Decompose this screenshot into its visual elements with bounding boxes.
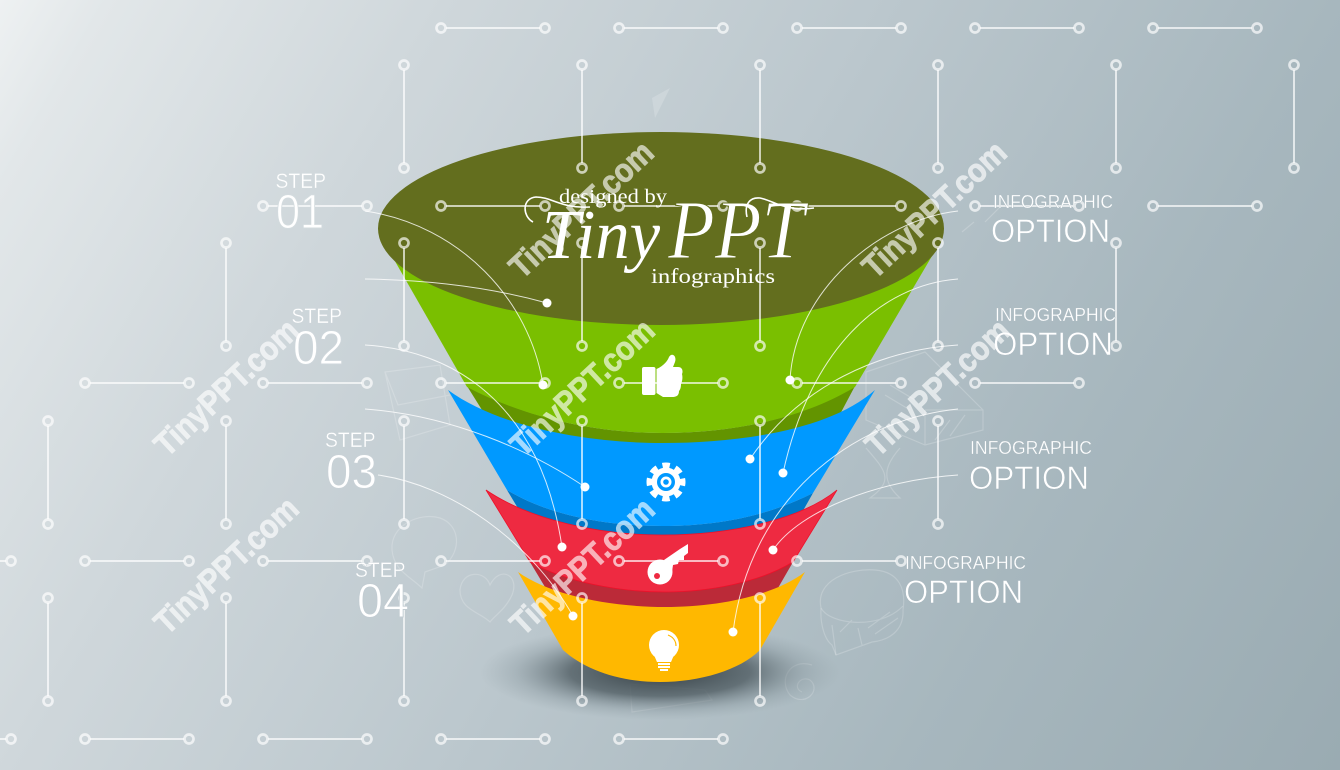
logo: TinyPPT script: Tiny xyxy=(542,197,661,274)
tier 3: red xyxy=(486,490,837,609)
option 1: OPTION xyxy=(991,213,1110,249)
option 2: INFOGRAPHIC xyxy=(995,305,1116,325)
logo: designed by: designed by xyxy=(559,186,667,208)
step 04: 04 xyxy=(357,575,409,628)
step 01: STEP xyxy=(276,170,326,193)
icon: gear xyxy=(650,466,682,498)
icon: key xyxy=(648,544,688,584)
funnel xyxy=(378,132,944,682)
watermarks: TinyPPT.com xyxy=(147,311,306,463)
watermarks: TinyPPT.com xyxy=(503,311,662,463)
step 02: 02 xyxy=(293,322,344,375)
step 01: 01 xyxy=(276,186,324,239)
option 4: OPTION xyxy=(904,574,1023,610)
logo: infographics: infographics xyxy=(651,264,775,288)
funnel top ellipse xyxy=(378,132,944,325)
connector curves xyxy=(365,211,958,632)
watermarks: TinyPPT.com xyxy=(858,311,1017,463)
watermarks: TinyPPT.com xyxy=(855,133,1014,285)
option labels xyxy=(904,192,1116,610)
option 3: OPTION xyxy=(969,460,1089,496)
step 02: STEP xyxy=(292,305,342,328)
watermarks: TinyPPT.com xyxy=(147,489,306,641)
tier 2: blue xyxy=(448,390,875,536)
watermarks: TinyPPT.com xyxy=(502,133,661,285)
watermarks: TinyPPT.com xyxy=(503,490,662,642)
watermarks xyxy=(147,133,1017,642)
option 1 xyxy=(991,192,1113,249)
logo xyxy=(525,184,814,288)
option 1: INFOGRAPHIC xyxy=(993,192,1113,212)
option 4 xyxy=(904,553,1026,610)
option 3 xyxy=(969,438,1092,496)
tier 1: green xyxy=(392,256,932,444)
option 3: INFOGRAPHIC xyxy=(970,438,1092,458)
step labels xyxy=(276,170,409,628)
shadow under funnel xyxy=(480,624,840,720)
step 04: STEP xyxy=(355,559,406,582)
logo: flourishes xyxy=(525,197,814,222)
tier 4: yellow xyxy=(518,572,805,682)
step 03: 03 xyxy=(326,446,377,499)
logo: TinyPPT script: PPT xyxy=(667,184,809,277)
icon: light bulb xyxy=(649,630,679,670)
option 2 xyxy=(993,305,1116,362)
faint sketch doodles xyxy=(385,205,1002,712)
connector dots xyxy=(538,298,794,636)
option 4: INFOGRAPHIC xyxy=(905,553,1026,573)
option 2: OPTION xyxy=(993,326,1113,362)
step 03: STEP xyxy=(325,429,376,452)
faint arrow xyxy=(652,88,670,118)
icon: thumbs up xyxy=(642,355,683,397)
